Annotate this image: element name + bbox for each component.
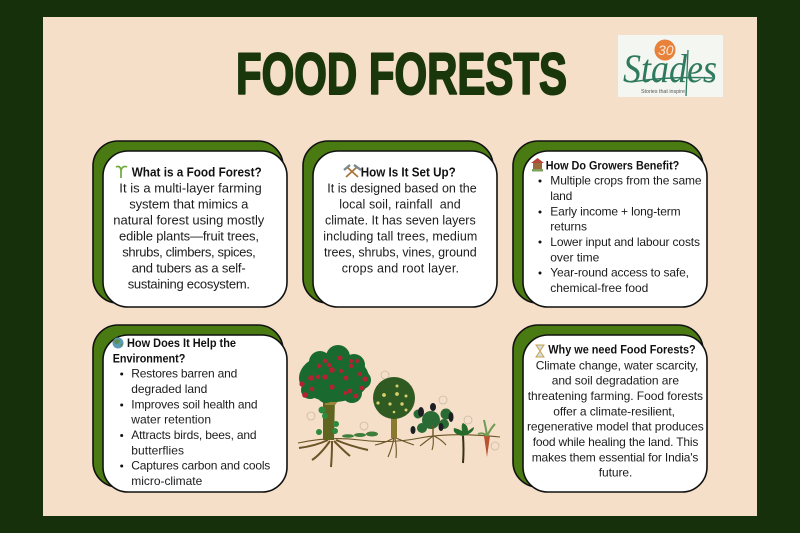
- body text: [527, 358, 704, 480]
- panel: how do growers benefit: [513, 141, 707, 307]
- heading: How Is It Set Up?: [361, 166, 456, 180]
- heading: Why we need Food Forests?: [548, 343, 696, 357]
- body text: food while healing the land. This: [533, 435, 698, 449]
- root crop: carrot: [484, 436, 490, 457]
- icon: hourglass: [536, 345, 544, 357]
- heading: How Does It Help the: [127, 336, 236, 350]
- icon: farmer: [531, 158, 544, 172]
- logo: 30 Stades: 30: [658, 42, 674, 58]
- bullet list: Lower input and labour costs: [550, 235, 700, 249]
- bullet list: Attracts birds, bees, and: [131, 428, 257, 442]
- bullet list: Multiple crops from the same: [550, 174, 702, 188]
- body text: and tubers as a self-: [132, 261, 246, 276]
- bullet list: butterflies: [131, 443, 184, 457]
- body text: and soil degradation are: [552, 374, 679, 388]
- shrub with vines: [414, 408, 452, 433]
- bullet list: micro-climate: [131, 474, 203, 488]
- panel: how does it help the environment: [93, 325, 287, 492]
- panel: what is a food forest: [93, 141, 287, 307]
- title: FOOD FORESTS: [236, 42, 567, 107]
- body text: Climate change, water scarcity,: [536, 358, 698, 372]
- logo: 30 Stades: Stades: [623, 46, 717, 91]
- banana-like plant: [454, 423, 474, 436]
- body text: trees, shrubs, vines, ground: [324, 246, 477, 260]
- body text: It is a multi-layer farming: [119, 181, 262, 196]
- body text: makes them essential for India's: [532, 450, 698, 464]
- illustration: seven layers of a food forest: [298, 345, 500, 467]
- bullet list: chemical-free food: [550, 281, 648, 295]
- climber on trunk: [316, 406, 339, 435]
- body text: edible plants—fruit trees,: [119, 229, 259, 244]
- body text: offer a climate-resilient,: [553, 404, 675, 418]
- logo: 30 Stades: Stories that inspire: [641, 89, 685, 95]
- panel: how is it set up: [303, 141, 497, 307]
- logo: 30 Stades: [618, 35, 723, 97]
- body text: natural forest using mostly: [113, 213, 265, 228]
- bullet list: [538, 174, 702, 295]
- body text: future.: [599, 466, 632, 480]
- icon: globe: [112, 338, 124, 348]
- tree 2: [391, 417, 397, 438]
- icon: sprout: [116, 166, 127, 178]
- bullet list: [120, 367, 270, 488]
- body text: including tall trees, medium: [323, 230, 477, 244]
- body text: system that mimics a: [129, 197, 249, 212]
- body text: shrubs, climbers, spices,: [122, 245, 256, 260]
- icon: hammer and pick: [344, 165, 361, 177]
- tree 1 crown: [299, 345, 371, 403]
- bullet list: Year-round access to safe,: [550, 266, 689, 280]
- heading: [113, 336, 236, 365]
- bullet list: degraded land: [131, 382, 207, 396]
- heading: What is a Food Forest?: [132, 165, 262, 180]
- body text: It is designed based on the: [327, 182, 477, 196]
- bullet list: Captures carbon and cools: [131, 459, 270, 473]
- body text: regenerative model that produces: [527, 420, 704, 434]
- body text: local soil, rainfall and: [339, 198, 461, 212]
- bullet list: land: [550, 189, 572, 203]
- bullet list: Early income + long-term: [550, 204, 681, 218]
- body text: crops and root layer.: [342, 262, 459, 276]
- bullet list: over time: [550, 250, 600, 264]
- bullet list: Restores barren and: [131, 367, 237, 381]
- layer number markers: [307, 371, 499, 450]
- body text: climate. It has seven layers: [325, 214, 476, 228]
- bullet list: Improves soil health and: [131, 397, 258, 411]
- heading: How Do Growers Benefit?: [546, 158, 679, 172]
- heading: Environment?: [113, 351, 185, 365]
- body text: [323, 182, 477, 276]
- ground cover: [342, 432, 378, 438]
- tree 1 trunk: [323, 398, 335, 440]
- body text: threatening farming. Food forests: [528, 389, 703, 403]
- bullet list: returns: [550, 220, 587, 234]
- panel: why we need food forests: [513, 325, 707, 492]
- ground line and roots: [298, 435, 500, 467]
- body text: sustaining ecosystem.: [128, 277, 250, 292]
- body text: [113, 181, 265, 292]
- bullet list: water retention: [130, 413, 211, 427]
